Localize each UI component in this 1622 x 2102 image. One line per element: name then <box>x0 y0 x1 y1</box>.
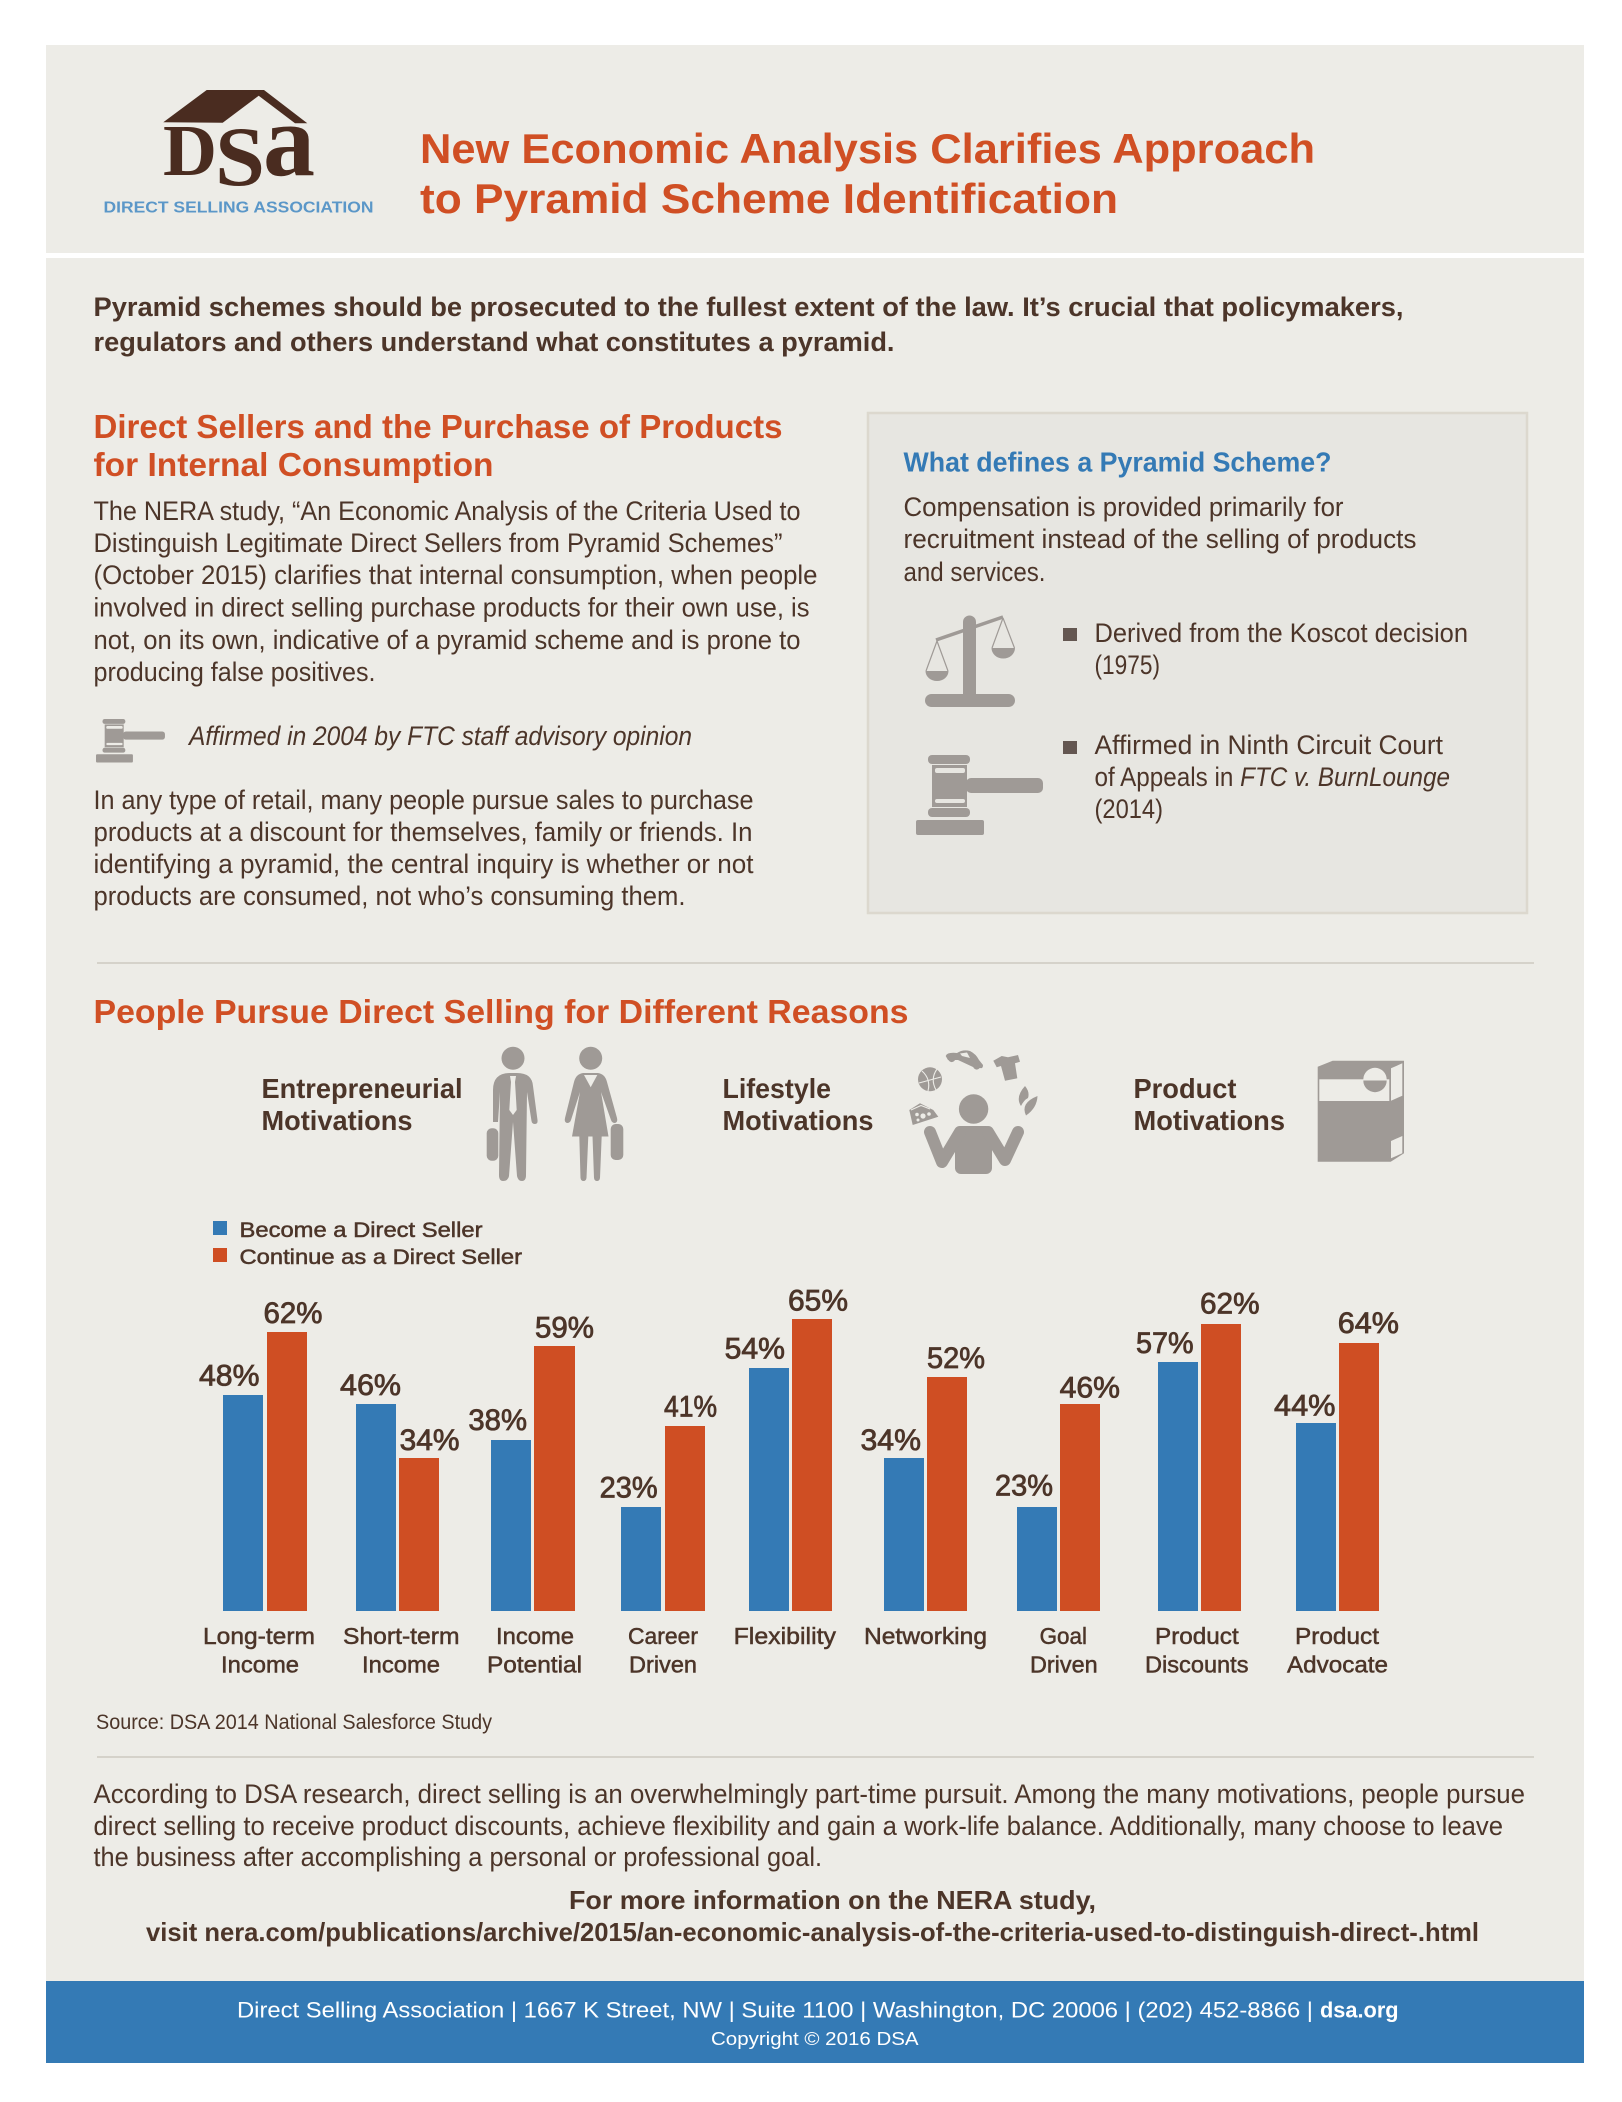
closing paragraph <box>94 1779 1525 1872</box>
bars: product discounts <box>1136 1288 1260 1678</box>
heading: direct sellers <box>94 408 782 483</box>
entrepreneurial motivations <box>262 1073 462 1136</box>
legend: Continue as a Direct Seller <box>240 1246 522 1269</box>
closing paragraph: direct selling to receive product discounts, achieve flexibility and gain a work-life balance. Additionally, many choose to leave <box>94 1811 1503 1841</box>
bars: networking: 52% <box>927 1342 985 1375</box>
bars: long-term income <box>199 1297 322 1678</box>
bullet: Koscot: (1975) <box>1094 650 1160 680</box>
icon: product box <box>1318 1061 1404 1162</box>
bullet: Ninth Circuit: of Appeals in FTC v. BurnLounge <box>1094 762 1450 792</box>
bars: goal driven: Goal <box>1040 1623 1087 1649</box>
panel: what defines a pyramid scheme <box>868 413 1527 913</box>
intro statement <box>94 292 1404 357</box>
icon: business people <box>487 1047 623 1181</box>
icon: juggling person <box>909 1050 1038 1174</box>
text block: NERA study <box>94 496 818 687</box>
bars: product advocate <box>1274 1307 1399 1678</box>
bars: product advocate: 44% <box>1274 1390 1336 1423</box>
text block: retail: identifying a pyramid, the central inquiry is whether or not <box>94 849 754 879</box>
text block: retail: In any type of retail, many people pursue sales to purchase <box>94 785 754 815</box>
bars: long-term income: Income <box>221 1652 299 1678</box>
closing paragraph: According to DSA research, direct selling is an overwhelmingly part-time pursuit. Among the many motivations, people pursue <box>94 1779 1525 1809</box>
bars: networking: Networking <box>864 1623 987 1649</box>
main body panel <box>46 258 1584 1981</box>
lifestyle motivations: Motivations <box>722 1105 874 1136</box>
bullet: Ninth Circuit: (2014) <box>1094 794 1163 824</box>
bars: income potential: 38% <box>468 1404 527 1437</box>
footer: dsa.org <box>1320 1998 1399 2023</box>
bars: career driven: Driven <box>629 1652 697 1678</box>
panel: internal consumption <box>94 408 818 911</box>
bars: flexibility: 54% <box>725 1333 785 1366</box>
title: to Pyramid Scheme Identification <box>420 175 1118 222</box>
bars: income potential: Income <box>496 1623 574 1649</box>
text block: NERA study: The NERA study, “An Economic Analysis of the Criteria Used to <box>94 496 800 526</box>
panel text: recruitment instead of the selling of products <box>904 524 1416 554</box>
bars: short-term income <box>340 1369 460 1678</box>
DSA logo: a <box>263 84 315 198</box>
bullet: Koscot <box>1063 618 1468 680</box>
lifestyle motivations <box>722 1073 874 1136</box>
bars: income potential: 59% <box>535 1312 594 1345</box>
bars: product discounts: 62% <box>1200 1288 1260 1321</box>
title <box>420 125 1315 222</box>
bars: product advocate: 64% <box>1338 1307 1399 1340</box>
bars: product advocate: Advocate <box>1287 1652 1388 1678</box>
DSA logo: D <box>163 110 217 191</box>
bars: income potential <box>468 1312 594 1678</box>
bars: career driven: 23% <box>600 1472 658 1505</box>
bars: short-term income: Short-term <box>343 1623 460 1649</box>
bars: career driven: Career <box>628 1623 698 1649</box>
bars: career driven: 41% <box>664 1391 717 1424</box>
text block: NERA study: (October 2015) clarifies that internal consumption, when people <box>94 560 818 590</box>
bars: flexibility <box>725 1285 848 1649</box>
panel text <box>904 492 1416 587</box>
lifestyle motivations: Lifestyle <box>722 1073 831 1104</box>
footer: Direct Selling Association | 1667 K Street, NW | Suite 1100 | Washington, DC 20006 | (202) 452-8866 | <box>237 1998 1313 2023</box>
DSA logo <box>104 84 374 216</box>
bars: short-term income: 46% <box>340 1369 401 1402</box>
bars: flexibility: 65% <box>788 1285 848 1318</box>
heading: direct sellers: Direct Sellers and the Purchase of Products <box>94 408 782 445</box>
source note: Source: DSA 2014 National Salesforce Study <box>96 1711 492 1734</box>
heading: direct sellers: for Internal Consumption <box>94 446 494 483</box>
bars: networking <box>860 1342 987 1649</box>
DSA logo: DIRECT SELLING ASSOCIATION <box>104 200 374 216</box>
closing paragraph: the business after accomplishing a personal or professional goal. <box>94 1842 822 1872</box>
bars: long-term income: Long-term <box>203 1623 315 1649</box>
entrepreneurial motivations: Motivations <box>262 1105 412 1136</box>
bars: product discounts: 57% <box>1136 1327 1194 1360</box>
panel text: and services. <box>904 557 1046 587</box>
text block: NERA study: producing false positives. <box>94 657 376 687</box>
intro statement: Pyramid schemes should be prosecuted to the fullest extent of the law. It’s crucial that policymakers, <box>94 292 1404 322</box>
title: New Economic Analysis Clarifies Approach <box>420 125 1315 172</box>
entrepreneurial motivations: Entrepreneurial <box>262 1073 462 1104</box>
panel heading: What defines a Pyramid Scheme? <box>904 446 1332 478</box>
footer: Copyright © 2016 DSA <box>711 2029 919 2049</box>
text block: retail: products at a discount for themselves, family or friends. In <box>94 817 752 847</box>
bars: short-term income: Income <box>362 1652 440 1678</box>
panel text: Compensation is provided primarily for <box>904 492 1344 522</box>
bars: career driven <box>600 1391 717 1678</box>
bars: goal driven: Driven <box>1030 1652 1098 1678</box>
bars: flexibility: Flexibility <box>734 1623 837 1649</box>
affirmed note: Affirmed in 2004 by FTC staff advisory opinion <box>187 721 692 751</box>
icon: scales <box>925 616 1015 707</box>
bars: short-term income: 34% <box>400 1424 460 1457</box>
product motivations: Motivations <box>1134 1105 1285 1136</box>
text block: retail: products are consumed, not who’s consuming them. <box>94 881 686 911</box>
intro statement: regulators and others understand what constitutes a pyramid. <box>94 327 894 357</box>
bars: goal driven: 23% <box>995 1470 1053 1503</box>
legend: Become a Direct Seller <box>240 1219 483 1242</box>
icon: large gavel <box>916 755 1043 835</box>
product motivations: Product <box>1134 1073 1236 1104</box>
text block: NERA study: not, on its own, indicative of a pyramid scheme and is prone to <box>94 625 800 655</box>
bars: long-term income: 62% <box>264 1297 322 1330</box>
bar chart <box>199 1285 1399 1678</box>
bars: long-term income: 48% <box>199 1360 260 1393</box>
bars: networking: 34% <box>860 1424 921 1457</box>
bars: goal driven <box>995 1372 1120 1678</box>
text block: NERA study: involved in direct selling purchase products for their own use, is <box>94 592 810 622</box>
footer <box>46 1981 1584 2063</box>
bars: product discounts: Discounts <box>1145 1652 1248 1678</box>
header panel <box>46 45 1584 253</box>
bullet: Ninth Circuit: Affirmed in Ninth Circuit Court <box>1094 730 1444 760</box>
DSA logo: S <box>215 110 265 204</box>
bars: income potential: Potential <box>487 1652 582 1678</box>
bullet: Koscot: Derived from the Koscot decision <box>1094 618 1468 648</box>
product motivations <box>1134 1073 1285 1136</box>
legend <box>213 1219 522 1269</box>
bullet: Ninth Circuit <box>1063 730 1450 824</box>
heading: different reasons: People Pursue Direct Selling for Different Reasons <box>94 993 908 1030</box>
bars: product discounts: Product <box>1155 1623 1239 1649</box>
text block: NERA study: Distinguish Legitimate Direct Sellers from Pyramid Schemes” <box>94 528 782 558</box>
more information link: For more information on the NERA study, <box>569 1885 1096 1915</box>
more information link: visit nera.com/publications/archive/2015/an-economic-analysis-of-the-criteria-used-to-distinguish-direct-.html <box>146 1917 1479 1947</box>
bars: goal driven: 46% <box>1060 1372 1120 1405</box>
more information link <box>146 1885 1479 1947</box>
bars: product advocate: Product <box>1295 1623 1380 1649</box>
icon: small gavel <box>96 719 165 762</box>
text block: retail <box>94 785 754 911</box>
